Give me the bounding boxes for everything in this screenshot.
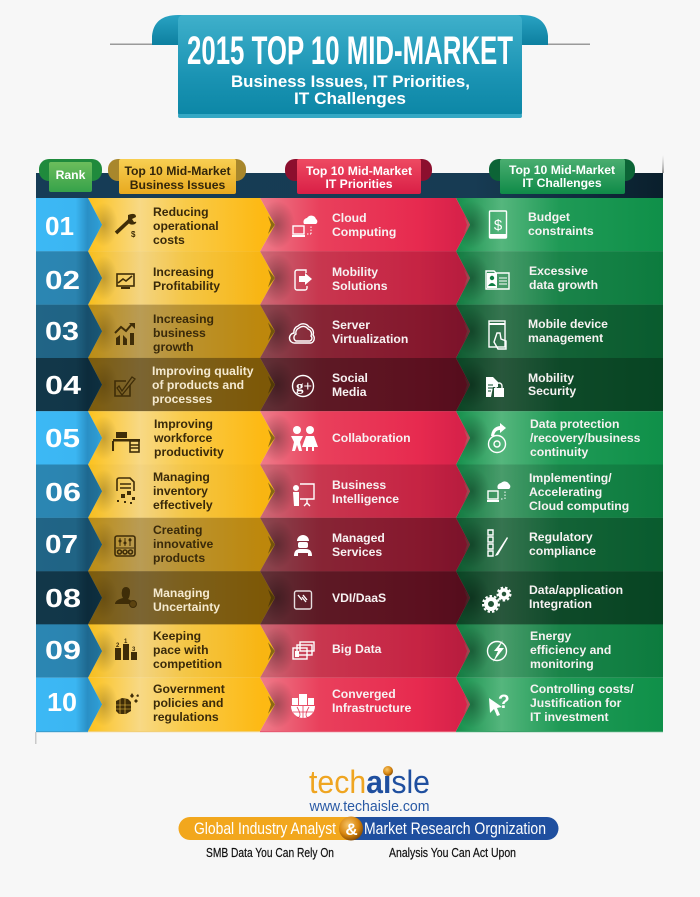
issue text: Profitability bbox=[153, 279, 220, 293]
challenge text: Controlling costs/ bbox=[530, 682, 634, 696]
logo ball bbox=[383, 766, 393, 776]
issue text: inventory bbox=[153, 484, 208, 498]
issue text: operational bbox=[153, 219, 219, 233]
title heading: 2015 TOP 10 MID-MARKET bbox=[187, 29, 513, 73]
priority text: Collaboration bbox=[332, 431, 411, 445]
icon: control panel bbox=[115, 536, 135, 556]
priority text: Solutions bbox=[332, 279, 388, 293]
icon: podium: 1 bbox=[124, 639, 128, 645]
issue text: Uncertainty bbox=[153, 600, 220, 614]
priority text: Infrastructure bbox=[332, 701, 411, 715]
slogan right: Analysis You Can Act Upon bbox=[389, 845, 516, 860]
icon: tablet with hand bbox=[489, 321, 506, 349]
rank tab: Rank bbox=[56, 168, 86, 182]
icon: growth chart bbox=[115, 323, 135, 345]
challenge text: Regulatory bbox=[529, 530, 593, 544]
row 03 bbox=[36, 305, 663, 358]
challenge text: Integration bbox=[529, 597, 592, 611]
icon: two people bbox=[291, 426, 318, 451]
priority text: Services bbox=[332, 545, 382, 559]
rank number 09: 09 bbox=[45, 635, 81, 665]
issue text: business bbox=[153, 326, 206, 340]
issue text: Improving quality bbox=[152, 364, 254, 378]
row 07 bbox=[36, 518, 663, 571]
challenge text: Data/application bbox=[529, 583, 623, 597]
business issues tab: Top 10 Mid-Market bbox=[124, 164, 231, 178]
tagline pill bbox=[179, 816, 559, 840]
row 01 bbox=[36, 198, 663, 251]
icon: lightning circle bbox=[488, 640, 506, 662]
icon: phone with dollar: $ bbox=[494, 217, 503, 234]
icon: podium bbox=[115, 639, 137, 660]
challenge text: Mobility bbox=[528, 371, 574, 385]
row 02 bbox=[36, 251, 663, 305]
row 06 bbox=[36, 464, 663, 518]
challenge text: efficiency and bbox=[530, 643, 611, 657]
issue text: costs bbox=[153, 233, 185, 247]
rank tab bbox=[39, 159, 102, 192]
challenge text: IT investment bbox=[530, 710, 609, 724]
priority text: VDI/DaaS bbox=[332, 591, 386, 605]
priority text: Big Data bbox=[332, 642, 382, 656]
issue text: pace with bbox=[153, 643, 209, 657]
challenge text: constraints bbox=[528, 224, 594, 238]
issue text: processes bbox=[152, 392, 213, 406]
row 09 bbox=[36, 624, 663, 678]
rank number 04: 04 bbox=[45, 370, 82, 400]
challenge text: Cloud computing bbox=[529, 499, 629, 513]
rank number 02: 02 bbox=[45, 265, 80, 295]
row 10 bbox=[36, 678, 663, 731]
challenge text: management bbox=[528, 331, 603, 345]
icon: cursor with question: ? bbox=[498, 692, 510, 713]
icon: stacked data cards bbox=[293, 642, 314, 659]
business issues tab bbox=[108, 159, 246, 194]
issue text: of products and bbox=[152, 378, 244, 392]
priority text: Managed bbox=[332, 531, 385, 545]
it priorities tab: Top 10 Mid-Market bbox=[306, 164, 412, 178]
priority text: Social bbox=[332, 371, 368, 385]
issue text: Government bbox=[153, 682, 225, 696]
issue text: Managing bbox=[153, 470, 210, 484]
slogan left: SMB Data You Can Rely On bbox=[206, 845, 334, 860]
rank number 06: 06 bbox=[45, 477, 81, 507]
challenge text: Mobile device bbox=[528, 317, 608, 331]
challenge text: monitoring bbox=[530, 657, 594, 671]
issue text: Creating bbox=[153, 523, 202, 537]
rank number 10: 10 bbox=[47, 687, 77, 717]
it priorities tab: IT Priorities bbox=[325, 177, 393, 191]
issue text: growth bbox=[153, 340, 194, 354]
icon: checklist and pen bbox=[488, 530, 508, 556]
rank number 03: 03 bbox=[45, 316, 79, 346]
icon: cloud computing bbox=[292, 216, 317, 237]
icon: cursor with question bbox=[489, 692, 510, 716]
icon: monitor chart bbox=[117, 274, 134, 288]
issue text: Reducing bbox=[153, 205, 209, 219]
icon: vdi square bbox=[294, 591, 312, 609]
icon: wrench and dollar: $ bbox=[131, 230, 136, 239]
issue text: competition bbox=[153, 657, 222, 671]
icon: wrench and dollar bbox=[116, 214, 136, 239]
challenge text: data growth bbox=[529, 278, 598, 292]
priority text: Virtualization bbox=[332, 332, 408, 346]
ampersand: & bbox=[345, 820, 358, 839]
challenge text: Security bbox=[528, 384, 576, 398]
priority text: Mobility bbox=[332, 265, 378, 279]
icon: phone with dollar bbox=[489, 211, 507, 238]
issue text: effectively bbox=[153, 498, 213, 512]
icon: service worker bbox=[294, 535, 312, 556]
subtitle: IT Challenges bbox=[294, 89, 406, 108]
challenge text: Data protection bbox=[530, 417, 619, 431]
table bottom edge bbox=[35, 731, 663, 744]
priority text: Media bbox=[332, 385, 367, 399]
rank number 01: 01 bbox=[45, 211, 74, 241]
challenge text: Implementing/ bbox=[529, 471, 612, 485]
rank number 08: 08 bbox=[45, 583, 81, 613]
issue text: Keeping bbox=[153, 629, 201, 643]
priority text: Cloud bbox=[332, 211, 367, 225]
row 05 bbox=[36, 411, 663, 465]
issue text: Increasing bbox=[153, 312, 214, 326]
it challenges tab bbox=[489, 159, 635, 194]
icon: disc with arrow bbox=[488, 423, 506, 452]
it challenges tab: Top 10 Mid-Market bbox=[509, 163, 615, 177]
icon: checklist box bbox=[115, 377, 135, 396]
tagline right: Market Research Orgnization bbox=[364, 819, 546, 838]
icon: cloud computing bbox=[487, 481, 510, 502]
business issues tab: Business Issues bbox=[130, 178, 225, 192]
row 08 bbox=[36, 571, 663, 624]
challenge text: Budget bbox=[528, 210, 570, 224]
icon: google plus bbox=[292, 376, 314, 396]
priority text: Converged bbox=[332, 687, 396, 701]
it priorities tab bbox=[285, 159, 432, 194]
challenge text: /recovery/business bbox=[530, 431, 641, 445]
icon: podium: 3 bbox=[132, 647, 136, 653]
icon: person with question bbox=[115, 587, 136, 608]
challenge text: Energy bbox=[530, 629, 572, 643]
icon: office desk bbox=[113, 432, 140, 452]
icon: globe with buildings bbox=[291, 694, 315, 718]
icon: cube cluster bbox=[116, 693, 139, 714]
priority text: Intelligence bbox=[332, 492, 399, 506]
issue text: workforce bbox=[153, 431, 212, 445]
issue text: Managing bbox=[153, 586, 210, 600]
subtitle: Business Issues, IT Priorities, bbox=[231, 72, 470, 91]
challenge text: Justification for bbox=[530, 696, 622, 710]
rank number 05: 05 bbox=[45, 423, 80, 453]
techaisle logo bbox=[309, 764, 430, 815]
issue text: policies and bbox=[153, 696, 223, 710]
it challenges tab: IT Challenges bbox=[522, 176, 602, 190]
table header bbox=[36, 155, 664, 198]
icon: google plus: g+ bbox=[296, 379, 312, 395]
priority text: Computing bbox=[332, 225, 396, 239]
icon: mobile arrow bbox=[295, 270, 312, 290]
icon: document with dots bbox=[117, 478, 135, 504]
challenge text: compliance bbox=[529, 544, 596, 558]
icon: cloud outline bbox=[289, 324, 314, 343]
row 04 bbox=[36, 358, 663, 411]
icon: podium: 2 bbox=[116, 643, 120, 649]
subtitle bbox=[231, 72, 470, 108]
icon: presenter at board bbox=[293, 484, 314, 506]
issue text: regulations bbox=[153, 710, 219, 724]
title banner bbox=[110, 15, 590, 118]
priority text: Business bbox=[332, 478, 386, 492]
icon: id card bbox=[486, 271, 509, 289]
logo wordmark: techaisle bbox=[309, 764, 430, 800]
challenge text: continuity bbox=[530, 445, 588, 459]
issue text: innovative bbox=[153, 537, 213, 551]
issue text: products bbox=[153, 551, 205, 565]
tagline left: Global Industry Analyst bbox=[194, 819, 336, 838]
rank number 07: 07 bbox=[45, 529, 78, 559]
issue text: Increasing bbox=[153, 265, 214, 279]
issue text: productivity bbox=[154, 445, 224, 459]
challenge text: Excessive bbox=[529, 264, 588, 278]
challenge text: Accelerating bbox=[529, 485, 602, 499]
priority text: Server bbox=[332, 318, 370, 332]
icon: document and lock bbox=[486, 377, 504, 397]
icon: gears bbox=[483, 588, 510, 612]
issue text: Improving bbox=[154, 417, 213, 431]
website url: www.techaisle.com bbox=[309, 799, 430, 815]
